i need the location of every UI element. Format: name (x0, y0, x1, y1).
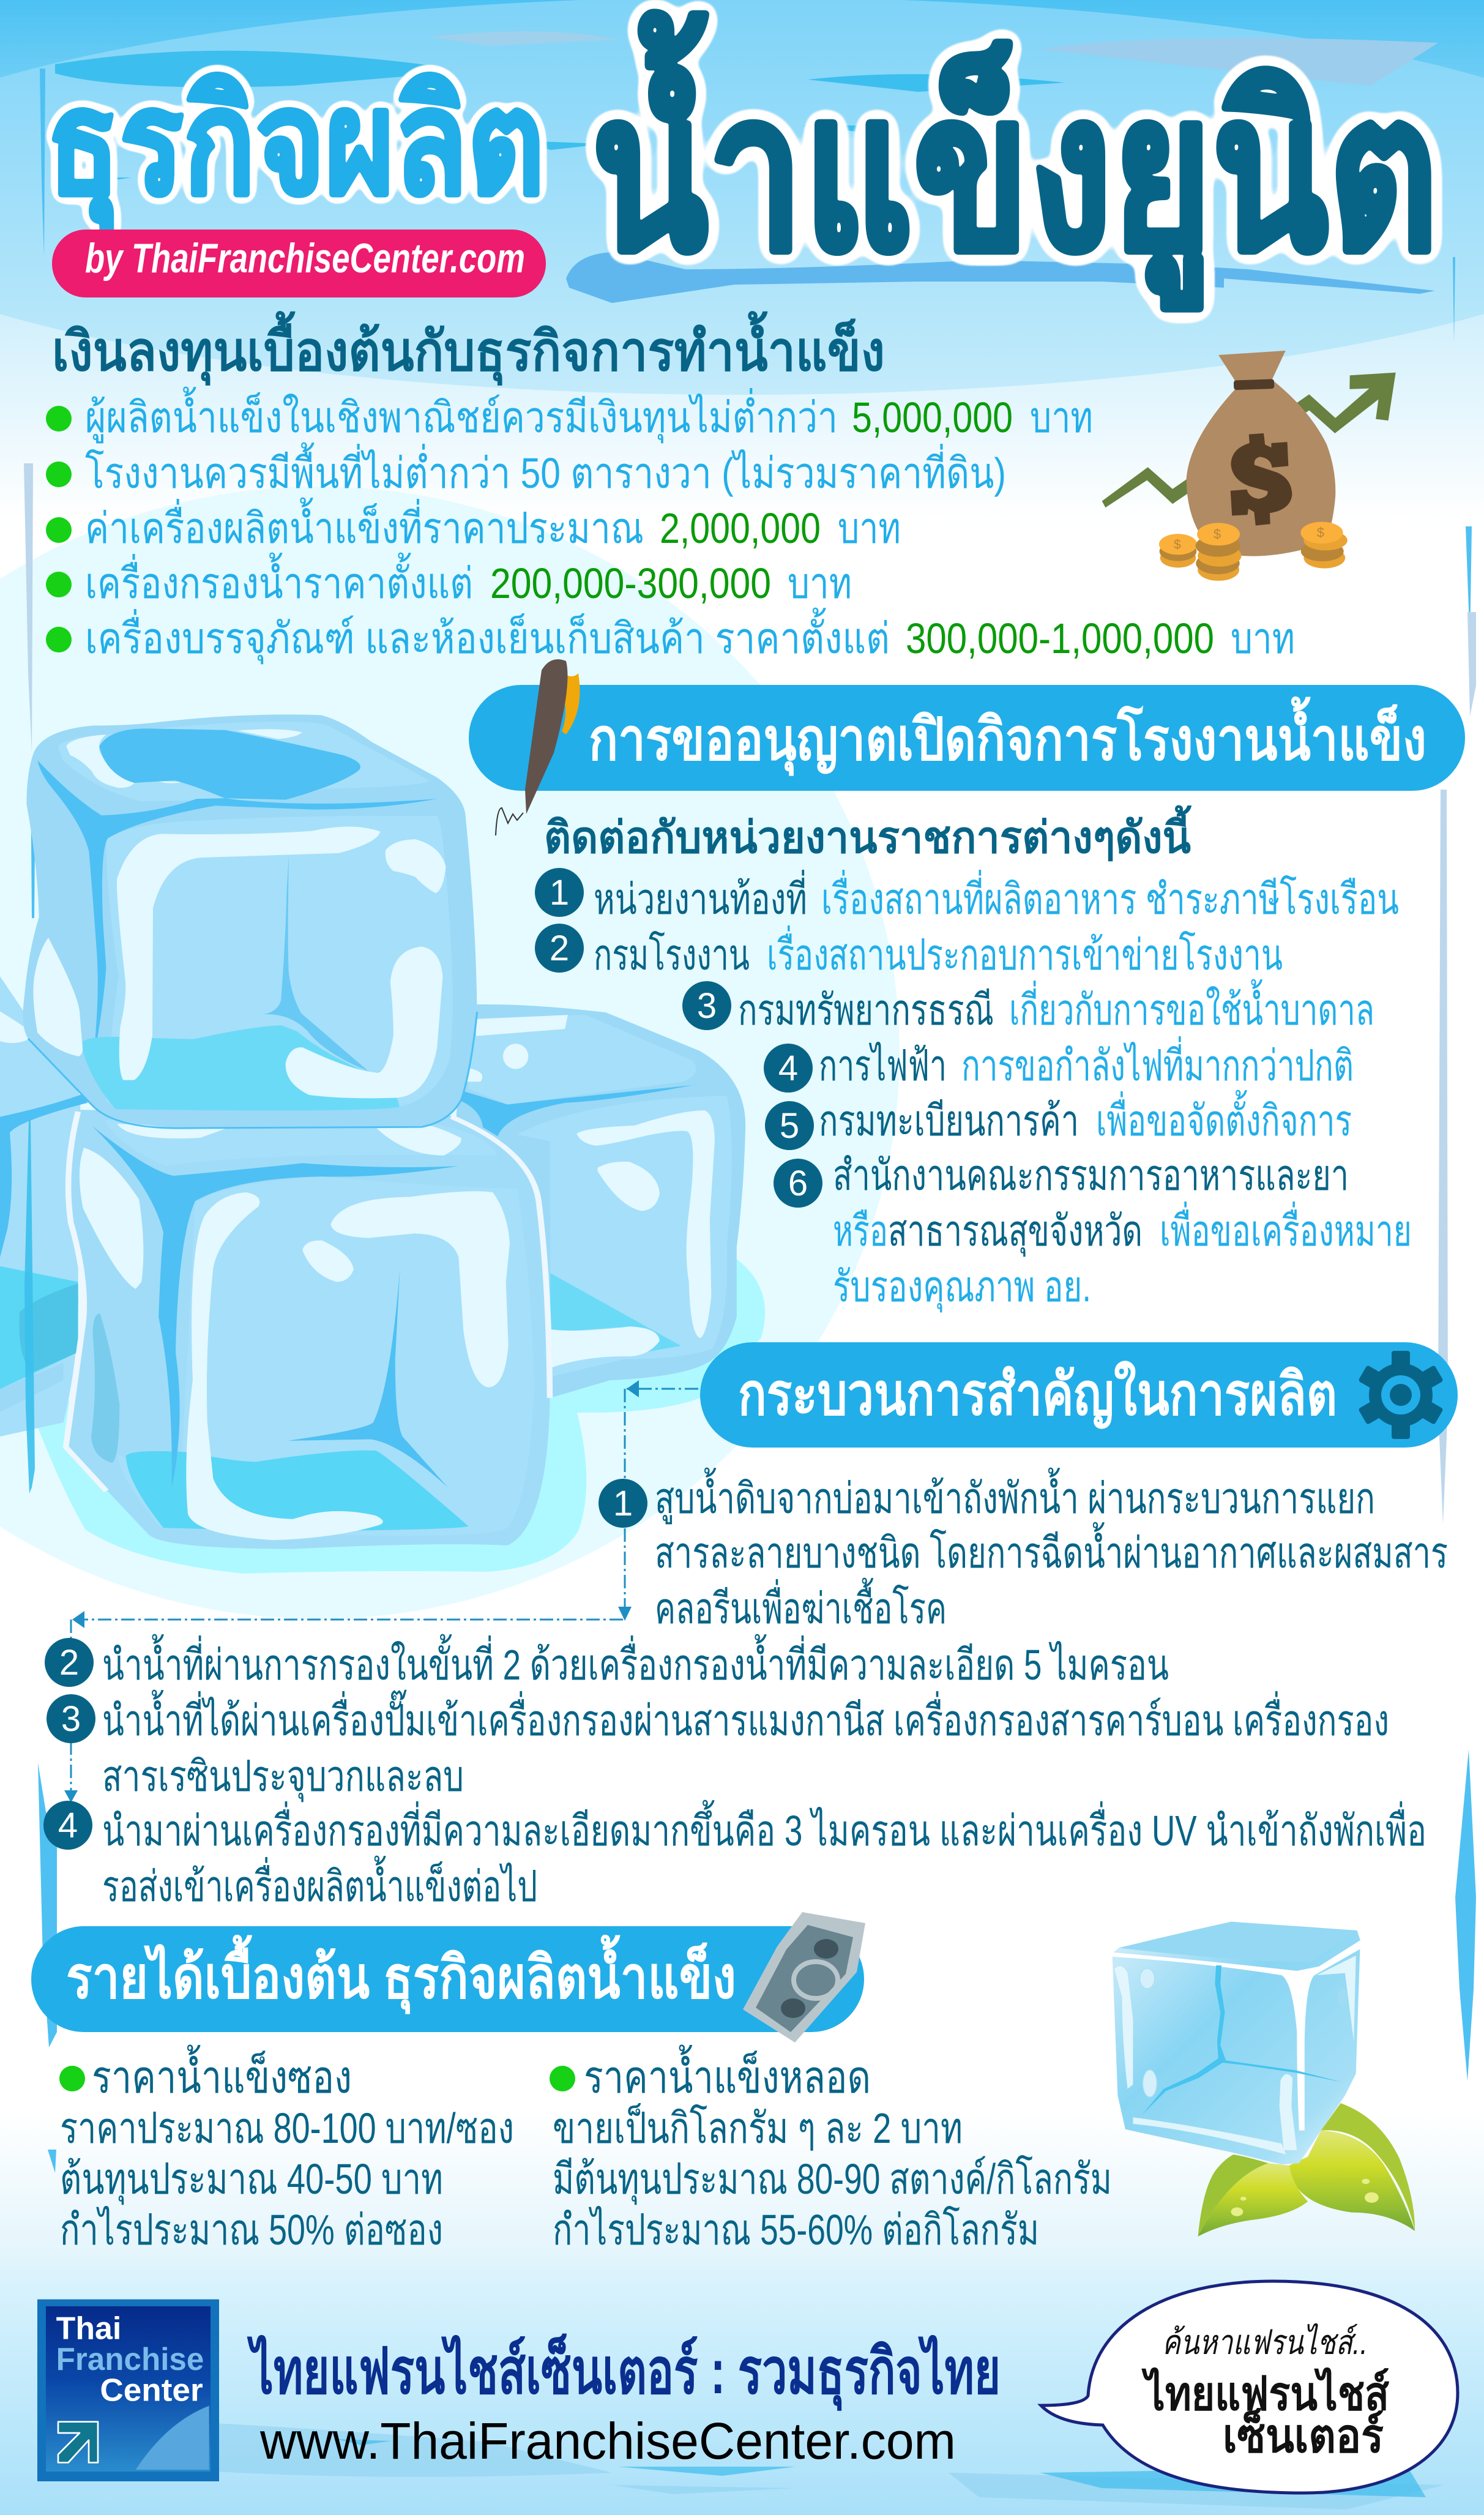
bag (1187, 351, 1335, 556)
panel: process header: กระบวนการสำคัญในการผลิต (738, 1361, 1337, 1430)
speech bubble: ค้นหาแฟรนไชส์.. (1162, 2323, 1368, 2361)
step 4 (43, 1799, 1426, 1910)
agency 2 (535, 924, 1283, 979)
panel: process header (700, 1342, 1458, 1448)
agency 6: 6 (788, 1164, 808, 1203)
icon: pen (496, 659, 580, 835)
icon: banknote (743, 1912, 865, 2042)
panel: income header (31, 1912, 865, 2042)
ice halo (0, 1259, 765, 1574)
agency 6: รับรองคุณภาพ อย. (833, 1263, 1091, 1313)
agency list (535, 868, 1412, 1313)
step 2 (45, 1634, 1169, 1689)
bullet 4: เครื่องกรองน้ำราคาตั้งแต่ (85, 552, 473, 607)
agency 1: หน่วยงานท้องที่ (594, 870, 807, 923)
agency 2: กรมโรงงาน (594, 930, 750, 979)
speech bubble: เซ็นเตอร์ (1223, 2408, 1384, 2462)
agency 4: การขอกำลังไฟที่มากกว่าปกติ (961, 1036, 1354, 1089)
bullet 1: ผู้ผลิตน้ำแข็งในเชิงพาณิชย์ควรมีเงินทุนไม่ต่ำกว่า (85, 386, 838, 444)
top ice cube (23, 714, 477, 1128)
icon: money bag with rising arrow (1102, 351, 1396, 581)
bullet 4 (46, 552, 852, 607)
income column: sachet ice: ราคาประมาณ 80-100 บาท/ซอง (60, 2104, 514, 2152)
process steps (43, 1467, 1448, 1910)
income column: sachet ice: ต้นทุนประมาณ 40-50 บาท (60, 2155, 443, 2205)
bullet 5: บาท (1231, 615, 1295, 662)
icon: gear (1358, 1351, 1444, 1439)
bullet 5: เครื่องบรรจุภัณฑ์ และห้องเย็นเก็บสินค้า ราคาตั้งแต่ (85, 607, 890, 665)
income column: sachet ice: ราคาน้ำแข็งซอง (92, 2044, 352, 2102)
far left ice cube (0, 976, 88, 1437)
step 1 (598, 1467, 1448, 1632)
bullet 5 (46, 607, 1295, 665)
streak over cubes (24, 1120, 35, 1493)
byline pill (52, 230, 546, 297)
bullet 3 (46, 497, 901, 552)
coin stack left: $ (1174, 537, 1181, 551)
lower left ice cube (66, 1110, 550, 1549)
cube (1111, 1922, 1360, 2164)
agency 2: 2 (550, 929, 569, 968)
logo: Thai Franchise Center: Franchise (56, 2341, 204, 2377)
step 1: คลอรีนเพื่อฆ่าเชื้อโรค (655, 1577, 947, 1632)
brush stroke under title (566, 252, 1435, 303)
bullet 1: 5,000,000 (852, 394, 1013, 441)
income column: sachet ice: กำไรประมาณ 50% ต่อซอง (60, 2206, 443, 2254)
panel: licensing header (469, 685, 1465, 791)
bullet 5: 300,000-1,000,000 (906, 615, 1214, 662)
illustration: ice cubes (0, 714, 765, 1574)
income column: tube ice: ราคาน้ำแข็งหลอด (584, 2044, 871, 2102)
agency 6 (774, 1151, 1412, 1313)
agency 1 (535, 868, 1399, 923)
bullet 1: บาท (1030, 394, 1093, 441)
agency 5: กรมทะเบียนการค้า (819, 1097, 1079, 1145)
byline pill: by ThaiFranchiseCenter.com (85, 235, 525, 282)
step 4: รอส่งเข้าเครื่องผลิตน้ำแข็งต่อไป (102, 1855, 537, 1910)
step 1: 1 (613, 1484, 633, 1523)
agency 3 (682, 979, 1374, 1034)
agency 3: กรมทรัพยากรธรณี (738, 986, 994, 1034)
income column: tube ice: ขายเป็นกิโลกรัม ๆ ละ 2 บาท (553, 2103, 963, 2152)
coin stack middle: $ (1214, 526, 1221, 542)
income column: tube ice (550, 2044, 1112, 2254)
bullet 2: โรงงานควรมีพื้นที่ไม่ต่ำกว่า 50 ตารางวา (ไม่รวมราคาที่ดิน) (85, 442, 1006, 497)
dollar sign (1231, 433, 1292, 526)
bullet 3: บาท (838, 504, 901, 552)
income column: sachet ice (59, 2044, 514, 2254)
bullet 4: 200,000-300,000 (490, 559, 771, 607)
subheading: contact agencies: ติดต่อกับหน่วยงานราชการต่างๆดังนี้ (544, 805, 1191, 862)
agency 6: สาธารณสุขจังหวัด (888, 1207, 1143, 1257)
income column: tube ice: มีต้นทุนประมาณ 80-90 สตางค์/กิโลกรัม (553, 2154, 1112, 2205)
footer url: www.ThaiFranchiseCenter.com (259, 2412, 956, 2470)
coin stack right: $ (1317, 525, 1324, 540)
process flow arrows (64, 1380, 698, 1803)
agency 4: 4 (778, 1048, 798, 1088)
step 2: 2 (59, 1643, 79, 1683)
coin stack right (1300, 521, 1348, 569)
speech bubble (1041, 2281, 1458, 2493)
title: left: ธุรกิจผลิต (47, 61, 545, 234)
speech bubble: ไทยแฟรนไชส์ (1141, 2367, 1390, 2420)
heading: investment: เงินลงทุนเบื้องต้นกับธุรกิจการทำน้ำแข็ง (52, 311, 885, 386)
agency 3: 3 (697, 986, 717, 1026)
agency 2: เรื่องสถานประกอบการเข้าข่ายโรงงาน (767, 925, 1283, 979)
coin stack middle (1196, 523, 1242, 581)
right ice cube (439, 1004, 745, 1398)
bullet 3: 2,000,000 (660, 504, 821, 552)
bullet 4: บาท (788, 559, 852, 607)
agency 5 (765, 1089, 1352, 1150)
agency 6: หรือ (833, 1207, 888, 1255)
footer tagline: ไทยแฟรนไชส์เซ็นเตอร์ : รวมธุรกิจไทย (247, 2333, 1001, 2411)
logo: Thai Franchise Center: Center (100, 2372, 203, 2408)
logo: Thai Franchise Center: Thai (56, 2311, 121, 2346)
agency 1: 1 (550, 873, 569, 913)
illustration: ice cube on leaves (1111, 1922, 1415, 2237)
step 2: นำน้ำที่ผ่านการกรองในขั้นที่ 2 ด้วยเครื่องกรองน้ำที่มีความละเอียด 5 ไมครอน (102, 1634, 1169, 1689)
agency 4: การไฟฟ้า (819, 1042, 947, 1089)
arrow (1102, 373, 1396, 507)
step 3 (47, 1689, 1389, 1803)
step 3: 3 (61, 1699, 81, 1739)
agency 5: 5 (780, 1106, 799, 1146)
logo: Thai Franchise Center (37, 2300, 219, 2481)
investment list (46, 386, 1295, 665)
leaves (1198, 2103, 1415, 2237)
income column: tube ice: กำไรประมาณ 55-60% ต่อกิโลกรัม (553, 2205, 1039, 2254)
agency 5: เพื่อขอจัดตั้งกิจการ (1096, 1089, 1352, 1145)
coin stack left (1159, 534, 1197, 567)
panel: income header: รายได้เบื้องต้น ธุรกิจผลิตน้ำแข็ง (66, 1934, 736, 2014)
bullet 3: ค่าเครื่องผลิตน้ำแข็งที่ราคาประมาณ (85, 497, 644, 552)
agency 4 (764, 1036, 1354, 1093)
step 3: สารเรซินประจุบวกและลบ (102, 1752, 464, 1803)
step 4: 4 (58, 1806, 78, 1845)
